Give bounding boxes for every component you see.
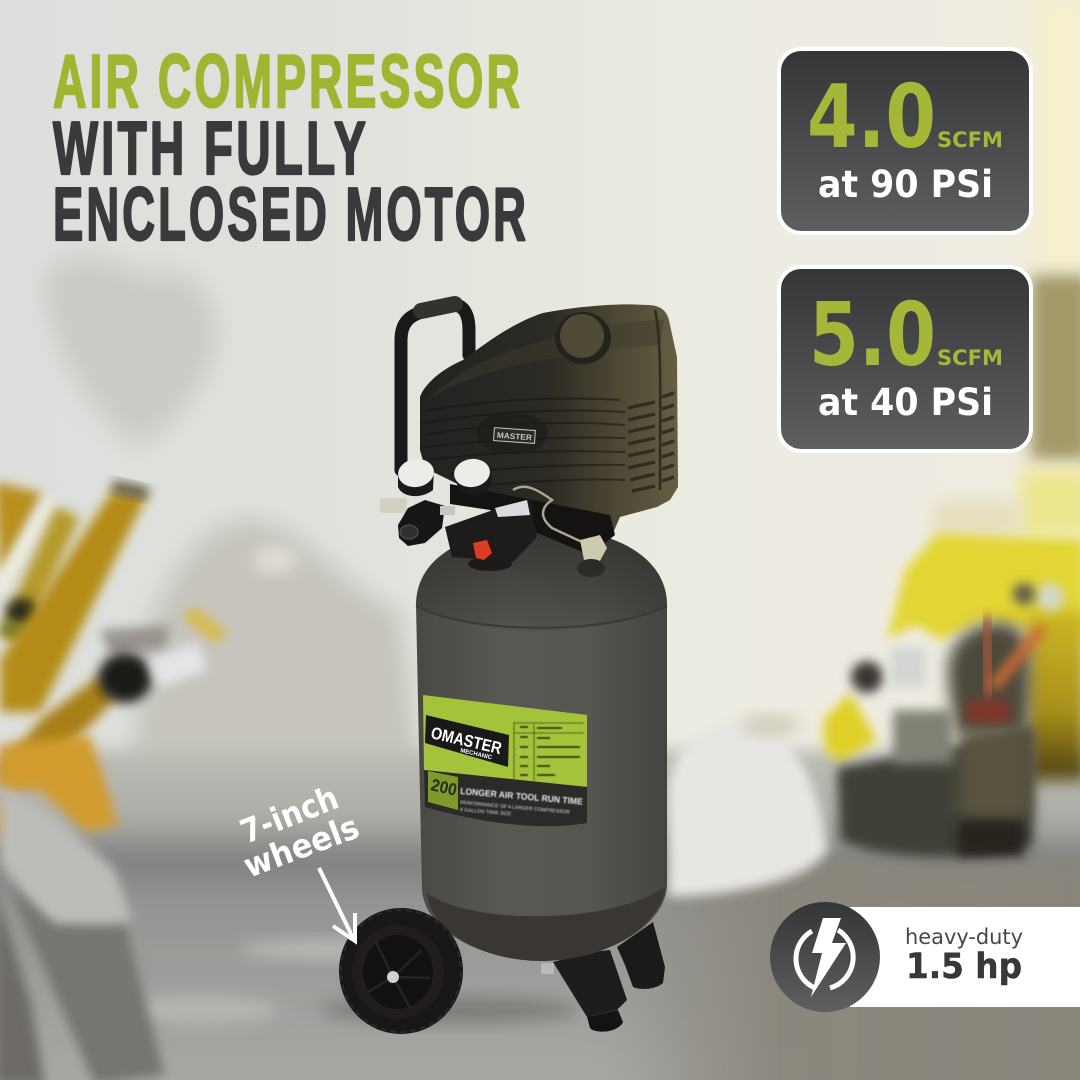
icon: lightning in circle: [770, 902, 880, 1012]
carrying handle: [401, 304, 469, 470]
power banner: [770, 902, 1080, 1012]
product label: [423, 695, 587, 826]
stat badge: 5.0 SCFM at 40 PSi: SCFM: [937, 346, 1003, 370]
arrow to wheel: [319, 868, 355, 941]
dark base under motor: [450, 484, 615, 555]
stat badge: 5.0 SCFM at 40 PSi: at 40 PSi: [818, 381, 993, 424]
stat badge: 4.0 SCFM at 90 PSi: [779, 49, 1031, 233]
200 badge: 200: [429, 775, 459, 800]
floor shadow: [320, 996, 580, 1024]
brand badge on motor: MASTER: [497, 431, 532, 442]
label tagline: [460, 786, 583, 818]
enclosed motor housing: [420, 304, 678, 533]
title: ENCLOSED MOTOR: [53, 172, 529, 256]
tank: [416, 528, 667, 961]
white strip: [850, 907, 1080, 1007]
200 badge: [428, 771, 459, 810]
1.5 hp text: 1.5 hp: [906, 947, 1022, 987]
stat badge: 4.0 SCFM at 90 PSi: 4.0: [807, 66, 936, 168]
copper line and drain fitting: [513, 487, 607, 577]
rear leg: [617, 922, 665, 989]
title: AIR COMPRESSOR: [53, 39, 523, 123]
label tagline: 6 GALLON TANK SIZE: [460, 807, 512, 818]
stat badge: 5.0 SCFM at 40 PSi: [779, 267, 1031, 451]
brand logo plate: [425, 715, 509, 767]
pressure gauges: [396, 457, 492, 496]
title: [53, 39, 529, 256]
spec table: [514, 722, 584, 781]
brand badge on motor: [494, 428, 535, 443]
label tagline: LONGER AIR TOOL RUN TIME: [460, 786, 583, 807]
pressure switch with red knob: [445, 500, 537, 571]
heavy-duty text: heavy-duty: [905, 925, 1023, 949]
label tagline: PERFORMANCE OF A LARGER COMPRESSOR: [460, 800, 570, 816]
ribbed motor cover: [421, 398, 625, 486]
front leg: [541, 950, 627, 1032]
stat badge: 4.0 SCFM at 90 PSi: at 90 PSi: [818, 163, 993, 206]
title: WITH FULLY: [53, 106, 369, 190]
stat badge: 5.0 SCFM at 40 PSi: 5.0: [809, 284, 936, 386]
round motor cap: [555, 312, 611, 364]
brand logo plate: MECHANIC: [460, 748, 493, 761]
ventilation slots: [628, 393, 674, 491]
brand logo plate: OMASTER: [429, 723, 504, 758]
callout: 7-inch wheels: wheels: [238, 807, 364, 885]
air compressor product: [320, 304, 678, 1034]
wheel: [339, 908, 463, 1034]
stat badge: 4.0 SCFM at 90 PSi: SCFM: [937, 128, 1003, 152]
callout: 7-inch wheels: 7-inch: [235, 778, 344, 851]
regulator and outlet fittings: [380, 498, 455, 546]
